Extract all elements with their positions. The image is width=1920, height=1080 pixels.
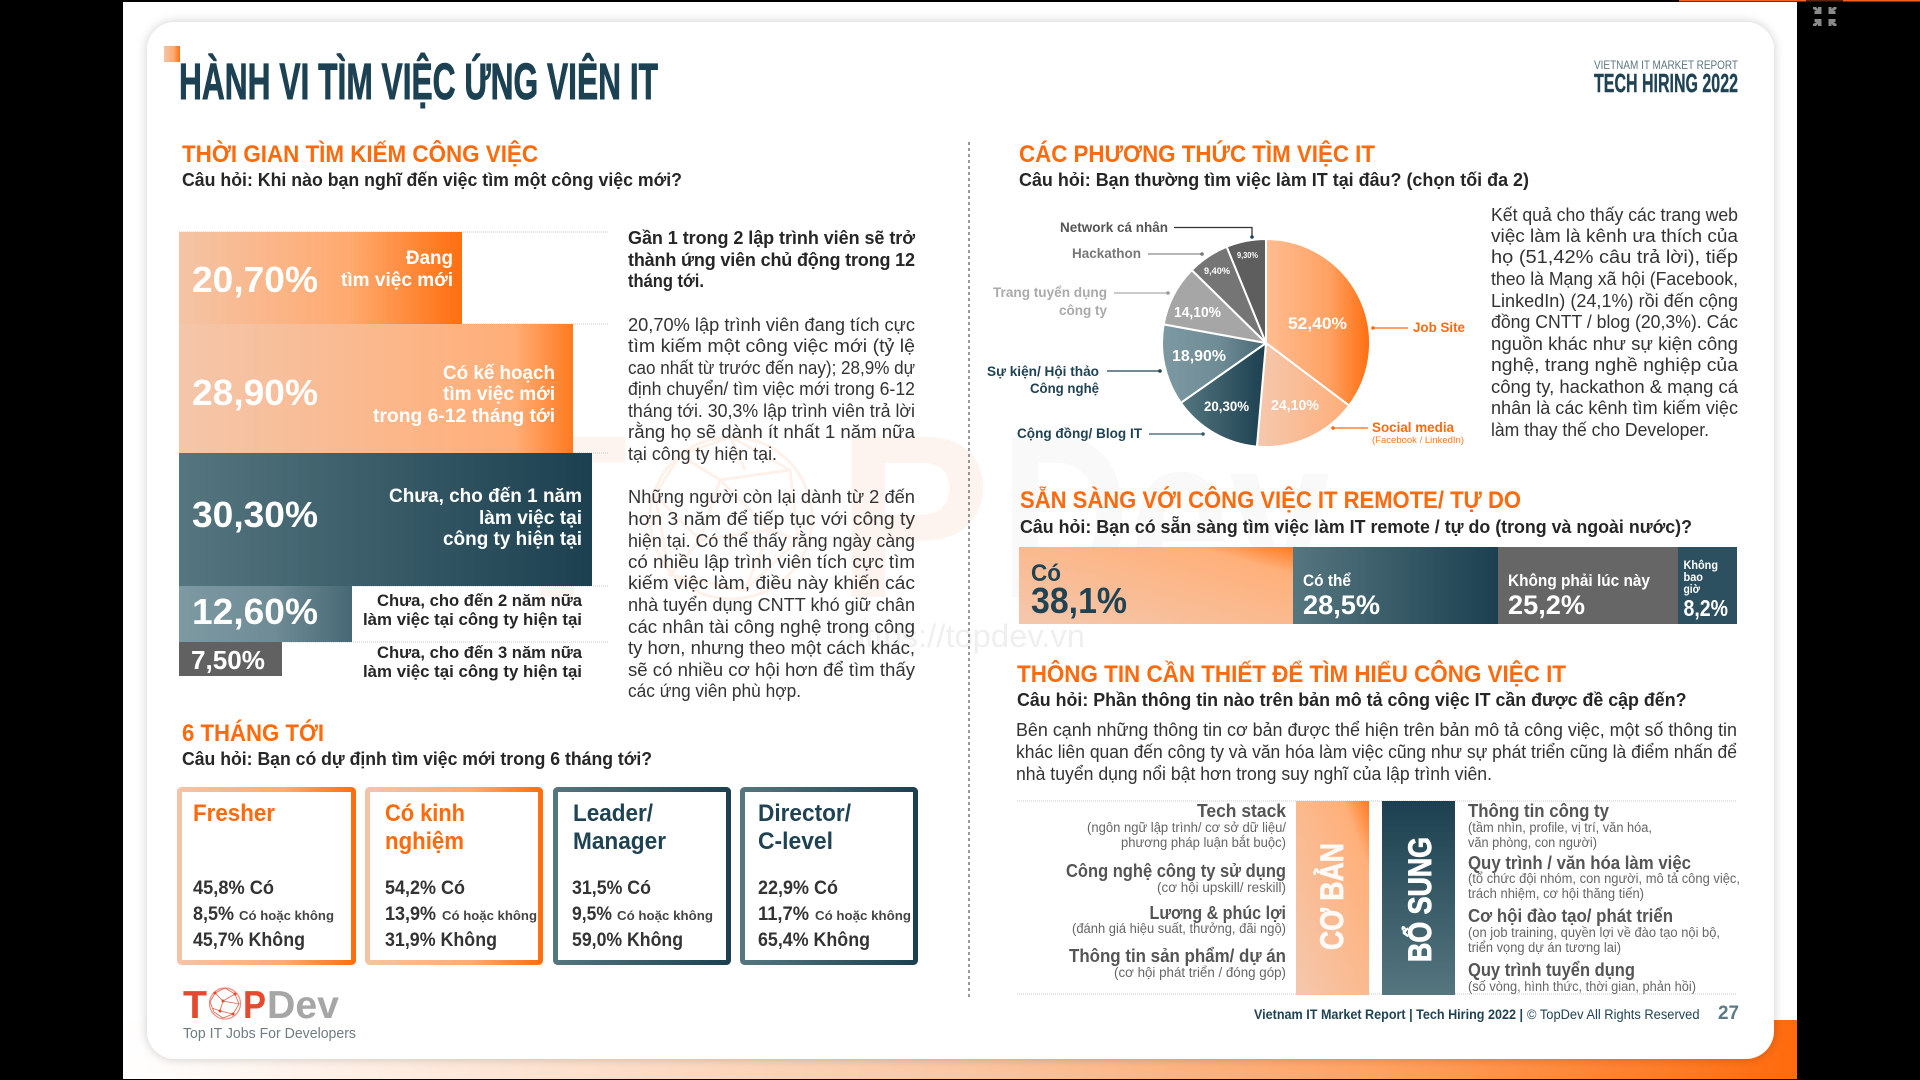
commentary text: 20,70% lập trình viên đang tích cực: [628, 315, 915, 335]
additional information list: (tầm nhìn, profile, vị trí, văn hóa,: [1468, 820, 1652, 835]
icon: network sphere: [210, 988, 240, 1019]
bar 30,30%: [179, 453, 592, 586]
channels commentary: Kết quả cho thấy các trang web: [1491, 205, 1738, 225]
card: director c-level: Director/: [758, 800, 851, 827]
bar 30,30%: 30,30%: [192, 494, 318, 535]
commentary text: tháng tới. 30,3% lập trình viên trả lời: [628, 401, 915, 421]
block: Bổ sung: [1382, 801, 1455, 995]
card: leader manager: 9,5%: [572, 904, 612, 925]
card: Fresher: 45,7% Không: [193, 930, 305, 951]
segment: Có: 38,1%: [1031, 580, 1127, 621]
bar 7,50%: [179, 642, 583, 681]
pie label: Hackathon: [1072, 245, 1204, 261]
commentary text: Những người còn lại dành từ 2 đến: [628, 487, 915, 507]
bar 12,60%: Chưa, cho đến 2 năm nữa: [377, 591, 583, 610]
card: director c-level: Có hoặc không: [815, 908, 911, 923]
pie label: Network: [1060, 219, 1254, 239]
card: leader manager: Có hoặc không: [617, 908, 713, 923]
commentary text: có nhiều lập trình viên tích cực tìm: [628, 552, 915, 572]
basic information list: Tech stack: [1197, 801, 1287, 821]
channels commentary: LinkedIn) (24,1%) rồi đến cộng: [1491, 291, 1738, 311]
heading: THỜI GIAN TÌM KIẾM CÔNG VIỆC: [182, 140, 538, 168]
card: director c-level: 11,7%: [758, 904, 809, 925]
bar 28,90%: Có kế hoạch: [443, 363, 555, 384]
card: director c-level: C-level: [758, 828, 833, 855]
pie label: events: [987, 363, 1162, 396]
basic information list: (ngôn ngữ lập trình/ cơ sở dữ liệu/: [1087, 820, 1286, 835]
commentary text: các ứng viên phù hợp.: [628, 681, 801, 701]
channels commentary: nghệ, trang nghề nghiệp của: [1491, 355, 1739, 375]
segment: Có: [1019, 547, 1293, 624]
channels commentary: đồng CNTT / blog (20,3%). Các: [1491, 312, 1738, 332]
segment: Có thể: 28,5%: [1303, 590, 1380, 620]
question: Câu hỏi: Bạn có sẵn sàng tìm việc làm IT remote / tự do (trong và ngoài nước)?: [1020, 515, 1692, 537]
card: leader manager: Leader/: [573, 800, 653, 827]
heading: THÔNG TIN CẦN THIẾT ĐỂ TÌM HIỂU CÔNG VIỆC IT: [1017, 660, 1566, 688]
card: experienced: 13,9%: [385, 904, 436, 925]
pie label: Job Site: [1371, 319, 1465, 335]
heading: 6 THÁNG TỚI: [182, 719, 324, 747]
intro text: nhà tuyển dụng nổi bật hơn trong suy nghĩ của lập trình viên.: [1016, 764, 1492, 784]
card: director c-level: 65,4% Không: [758, 930, 870, 951]
tagline: Top IT Jobs For Developers: [183, 1025, 356, 1042]
commentary text: tháng tới.: [628, 271, 704, 291]
card: leader manager: Manager: [573, 828, 666, 855]
card: experienced: Có hoặc không: [442, 908, 537, 923]
bar 7,50%: 7,50%: [191, 645, 265, 675]
bar 30,30%: làm việc tại: [479, 508, 582, 529]
additional information list: văn phòng, con người): [1468, 835, 1597, 850]
commentary text: kiếm việc làm, điều này khiến các: [628, 573, 915, 593]
panel: required job information: [1016, 660, 1740, 995]
question: Câu hỏi: Bạn có dự định tìm việc mới trong 6 tháng tới?: [182, 748, 652, 769]
watermark: https://topdev.vn: [847, 618, 1085, 654]
channels commentary: nhân là các kênh tìm kiếm việc: [1491, 398, 1738, 418]
card: experienced: [368, 790, 540, 962]
commentary text: tìm kiếm một công việc mới (tỷ lệ: [628, 336, 915, 356]
intro text: khác liên quan đến công ty và văn hóa làm việc cũng như sự phát triển cũng là điểm nhấn để: [1016, 742, 1737, 762]
card: Fresher: [180, 790, 354, 962]
segment: Không phải lúc này: Không phải lúc này: [1508, 571, 1650, 590]
additional information list: Thông tin công ty: [1468, 801, 1609, 821]
report badge: TECH HIRING 2022: [1594, 68, 1738, 98]
panel: next 6 months: [180, 719, 916, 962]
commentary text: tại công ty hiện tại.: [628, 444, 777, 464]
pie label: Social media: (Facebook / LinkedIn): [1372, 435, 1464, 445]
bar 30,30%: Chưa, cho đến 1 năm: [389, 486, 582, 507]
segment: Không bao giờ: 8,2%: [1684, 595, 1728, 621]
pie label: community: [1017, 425, 1205, 441]
pie chart: 14,10%: [1174, 304, 1221, 321]
commentary text: [628, 228, 916, 701]
intro text: [1016, 720, 1737, 784]
card: leader manager: 31,5% Có: [572, 878, 651, 899]
commentary text: cao nhất từ trước đến nay); 28,9% dự: [628, 358, 915, 378]
title accent square: [164, 46, 180, 62]
card: leader manager: [556, 790, 728, 962]
pie chart: 9,30%: [1237, 251, 1258, 260]
block: Cơ bản: CƠ BẢN: [1314, 843, 1350, 950]
footer: © TopDev All Rights Reserved: [1527, 1007, 1700, 1022]
commentary text: nhà tuyển dụng CNTT khó giữ chân: [628, 595, 915, 615]
segment: Có: Có: [1031, 560, 1061, 587]
commentary text: các nhân tài công nghệ trong công: [628, 617, 915, 637]
basic information list: Lương & phúc lợi: [1150, 903, 1286, 923]
basic information list: Công nghệ công ty sử dụng: [1066, 861, 1286, 881]
panel: job search channels: [987, 140, 1739, 447]
additional information list: Cơ hội đào tạo/ phát triển: [1468, 906, 1673, 926]
pie chart: [1162, 239, 1370, 447]
bar 28,90%: trong 6-12 tháng tới: [373, 406, 555, 427]
card: Fresher: Có hoặc không: [239, 908, 334, 923]
channels commentary: họ (51,42% câu trả lời), tiếp: [1491, 247, 1738, 267]
commentary text: rằng họ sẽ dành ít nhất 1 năm nữa: [628, 421, 916, 442]
pie label: Job Site: Job Site: [1413, 319, 1465, 335]
report badge: VIETNAM IT MARKET REPORT: [1594, 58, 1739, 72]
bar 20,70%: 20,70%: [192, 259, 318, 300]
card: experienced: nghiệm: [385, 828, 464, 855]
pie label: events: Công nghệ: [1030, 380, 1099, 396]
basic information list: phương pháp luận bắt buộc): [1121, 835, 1286, 850]
stacked bars: [179, 232, 609, 681]
pie label: Social media: Social media: [1372, 419, 1454, 435]
card: experienced: Có kinh: [385, 800, 465, 827]
additional information list: [1468, 801, 1740, 994]
additional information list: (on job training, quyền lợi về đào tạo nội bộ,: [1468, 925, 1720, 940]
segment: Không bao giờ: Không: [1684, 558, 1718, 572]
question: Câu hỏi: Phần thông tin nào trên bản mô tả công việc IT cần được đề cập đến?: [1017, 689, 1686, 710]
pie label: events: Sự kiện/ Hội thảo: [987, 363, 1099, 379]
logo: TopDev: [183, 984, 356, 1042]
bar 12,60%: [179, 586, 583, 642]
logo: TopDev: Dev: [267, 984, 339, 1027]
heading: SẴN SÀNG VỚI CÔNG VIỆC IT REMOTE/ TỰ DO: [1020, 486, 1521, 514]
pie chart: 24,10%: [1271, 397, 1319, 414]
pie label: company career site: công ty: [1059, 302, 1107, 318]
channels commentary: theo là Mạng xã hội (Facebook,: [1491, 269, 1738, 289]
watermark: P: [836, 387, 991, 647]
question: Câu hỏi: Bạn thường tìm việc làm IT tại đâu? (chọn tối đa 2): [1019, 169, 1529, 190]
segment: Không phải lúc này: [1498, 547, 1678, 624]
segment: Không bao giờ: giờ: [1684, 582, 1700, 596]
card: Fresher: Fresher: [193, 800, 275, 827]
intro text: Bên cạnh những thông tin cơ bản được thể hiện trên bản mô tả công việc, một số thông tin: [1016, 720, 1737, 740]
panel: job search time: [179, 140, 916, 701]
pie chart: 52,40%: [1288, 314, 1347, 333]
card: director c-level: 22,9% Có: [758, 878, 838, 899]
additional information list: Quy trình tuyển dụng: [1468, 960, 1635, 980]
card: Fresher: 45,8% Có: [193, 878, 274, 899]
pie label: Social media: [1331, 419, 1464, 445]
commentary text: Gần 1 trong 2 lập trình viên sẽ trở: [628, 228, 915, 248]
commentary text: sẽ có nhiều cơ hội hơn để tìm thấy: [628, 660, 915, 680]
channels commentary: làm thay thế cho Developer.: [1491, 420, 1709, 440]
panel: remote readiness: [1019, 486, 1737, 624]
commentary text: ty hơn, nhưng theo một cách khác,: [628, 638, 915, 658]
title text: HÀNH VI TÌM VIỆC ỨNG VIÊN IT: [179, 52, 658, 110]
additional information list: triển vọng dự án tương lai): [1468, 940, 1621, 955]
bar 20,70%: [179, 232, 462, 324]
card: director c-level: [742, 790, 916, 962]
footer: Vietnam IT Market Report | Tech Hiring 2022 |: [1254, 1007, 1523, 1022]
pie chart: 9,40%: [1204, 266, 1231, 277]
commentary text: thành ứng viên chủ động trong 12: [628, 250, 915, 270]
heading: CÁC PHƯƠNG THỨC TÌM VIỆC IT: [1019, 140, 1375, 168]
basic information list: (cơ hội upskill/ reskill): [1157, 880, 1286, 895]
pie label: company career site: [993, 284, 1170, 318]
bar 7,50%: Chưa, cho đến 3 năm nữa: [377, 643, 583, 662]
watermark: [486, 387, 1330, 654]
watermark: Dev: [1000, 387, 1330, 647]
bar 28,90%: 28,90%: [192, 372, 318, 413]
logo: TopDev: T: [183, 984, 207, 1027]
page number: 27: [1718, 1003, 1739, 1024]
pie label: company career site: Trang tuyển dụng: [993, 284, 1107, 300]
channels commentary: việc làm là kênh ưa thích của: [1491, 226, 1739, 246]
segment: Có thể: Có thể: [1303, 571, 1351, 590]
basic information list: [1066, 801, 1287, 980]
footer: [1254, 1003, 1739, 1024]
basic information list: (đánh giá hiệu suất, thưởng, đãi ngộ): [1072, 921, 1286, 936]
pie label: community: Cộng đồng/ Blog IT: [1017, 425, 1142, 441]
title: [164, 46, 658, 110]
bar 28,90%: tìm việc mới: [443, 384, 555, 405]
card: experienced: 31,9% Không: [385, 930, 497, 951]
bar 12,60%: làm việc tại công ty hiện tại: [363, 610, 582, 629]
basic information list: Thông tin sản phẩm/ dự án: [1069, 946, 1286, 966]
segment: Không bao giờ: bao: [1684, 570, 1703, 584]
commentary text: hiện tại. Có thể thấy rằng ngày càng: [628, 530, 915, 551]
commentary text: định chuyển/ tìm việc mới trong 6-12: [628, 379, 915, 399]
icon: collapse fullscreen: [1813, 7, 1836, 26]
bar 28,90%: [179, 324, 573, 453]
bar 12,60%: 12,60%: [192, 591, 318, 632]
segment: Không phải lúc này: 25,2%: [1508, 590, 1585, 620]
logo: TopDev: P: [243, 984, 266, 1027]
bar 7,50%: làm việc tại công ty hiện tại: [363, 662, 582, 681]
commentary text: hơn 3 năm để tiếp tục với công ty: [628, 509, 915, 529]
block: Bổ sung: BỔ SUNG: [1402, 837, 1438, 962]
segment: Có thể: [1293, 547, 1498, 624]
additional information list: Quy trình / văn hóa làm việc: [1468, 853, 1691, 873]
bar 20,70%: Đang: [406, 248, 453, 269]
channels commentary: nguồn khác như sự kiện công: [1491, 334, 1738, 354]
card: experienced: 54,2% Có: [385, 878, 465, 899]
watermark: T: [486, 387, 628, 647]
pie label: Hackathon: Hackathon: [1072, 245, 1141, 261]
channels commentary: [1491, 205, 1739, 440]
additional information list: (tổ chức đội nhóm, con người, mô tả công việc,: [1468, 871, 1740, 886]
segment: Không bao giờ: [1678, 547, 1737, 624]
pie chart: 18,90%: [1172, 348, 1226, 365]
card: leader manager: 59,0% Không: [572, 930, 683, 951]
bar 20,70%: tìm việc mới: [341, 270, 453, 291]
report badge: [1594, 58, 1739, 98]
divider: [968, 142, 970, 998]
card: Fresher: 8,5%: [193, 904, 234, 925]
block: Cơ bản: [1296, 801, 1369, 995]
bar 30,30%: công ty hiện tại: [443, 529, 582, 550]
question: Câu hỏi: Khi nào bạn nghĩ đến việc tìm một công việc mới?: [182, 169, 682, 190]
additional information list: (số vòng, hình thức, thời gian, phản hồi): [1468, 979, 1696, 994]
additional information list: trách nhiệm, cơ hội thăng tiến): [1468, 886, 1644, 901]
pie chart: 20,30%: [1204, 398, 1250, 414]
channels commentary: công ty, hackathon & mạng cá: [1491, 377, 1739, 397]
pie label: Network: Network cá nhân: [1060, 219, 1168, 235]
basic information list: (cơ hội phát triển / đóng góp): [1114, 965, 1286, 980]
